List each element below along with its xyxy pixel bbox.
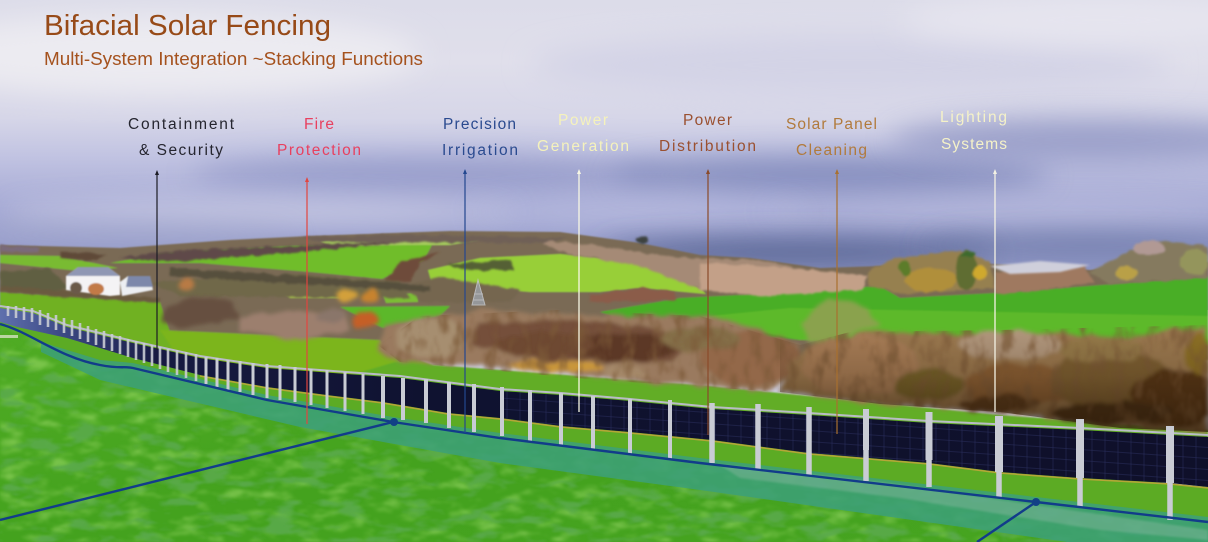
label: precision irrigation: Precision <box>443 116 516 133</box>
farmhouse <box>66 267 153 296</box>
arrow: containment <box>155 170 159 350</box>
arrow: lighting systems <box>993 169 997 412</box>
label: precision irrigation <box>442 116 518 159</box>
label: containment and security <box>128 116 235 159</box>
label: solar panel cleaning: Solar Panel <box>786 116 877 133</box>
bush texture <box>380 310 1208 432</box>
arrow: precision irrigation <box>463 169 467 433</box>
arrow: power generation <box>577 169 581 412</box>
foreground grass <box>0 320 1208 542</box>
label: fire protection: Protection <box>277 142 361 159</box>
label: fire protection: Fire <box>304 116 334 133</box>
subtitle: Multi-System Integration ~Stacking Functions <box>44 49 423 69</box>
fence posts <box>8 306 1170 520</box>
label: power generation: Generation <box>537 138 629 155</box>
arrow: solar panel cleaning <box>835 169 839 434</box>
label: solar panel cleaning <box>786 116 877 159</box>
grass strip between posts <box>0 322 1208 522</box>
label: containment and security: & Security <box>139 142 223 159</box>
label: power distribution: Distribution <box>659 138 756 155</box>
label: power generation: Power <box>558 112 608 129</box>
midground fields <box>0 231 1208 460</box>
label: fire protection <box>277 116 361 159</box>
label: power distribution: Power <box>683 112 732 129</box>
fence rails <box>0 306 1208 488</box>
label: solar panel cleaning: Cleaning <box>796 142 867 159</box>
teal irrigation band <box>41 342 1208 542</box>
distant town <box>990 261 1090 274</box>
right bush row <box>780 325 1208 432</box>
label: lighting systems <box>940 109 1007 153</box>
label: lighting systems: Lighting <box>940 109 1007 126</box>
label: containment and security: Containment <box>128 116 235 133</box>
label: lighting systems: Systems <box>941 136 1007 153</box>
pale hedge tree <box>798 298 880 342</box>
arrow: fire protection <box>305 177 309 424</box>
distant hedgerows and ridge <box>0 235 1208 303</box>
pylon <box>472 280 485 305</box>
sky background <box>0 0 1208 310</box>
label: power generation <box>537 112 629 155</box>
irrigation line <box>0 324 1208 522</box>
label: power distribution <box>659 112 756 155</box>
pale gravel in band <box>720 465 1208 540</box>
irrigation feed line right <box>977 498 1040 542</box>
irrigation feed line left <box>0 418 398 520</box>
solar fence panels <box>0 308 1208 490</box>
arrow: power distribution <box>706 169 710 435</box>
middle bush row <box>378 310 800 390</box>
near bushes left <box>162 279 380 340</box>
label: precision irrigation: Irrigation <box>442 142 518 159</box>
title: Bifacial Solar Fencing <box>44 10 331 42</box>
